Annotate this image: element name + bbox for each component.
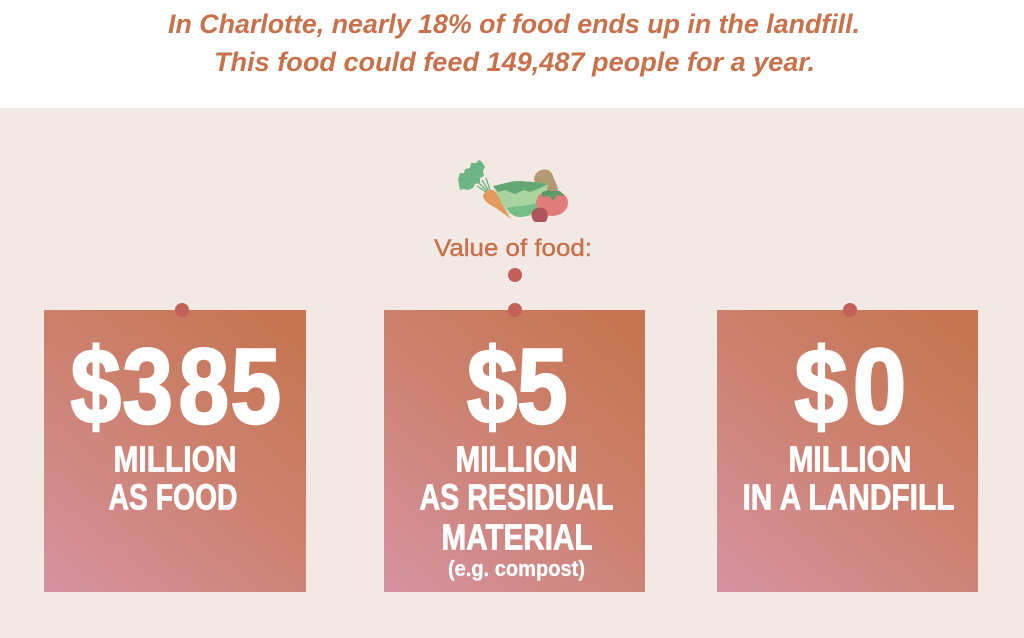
label: value of food: Value of food: xyxy=(434,235,592,262)
title: This food could feed 149,487 people for a year. xyxy=(214,47,815,77)
caption: MILLION xyxy=(114,438,236,480)
panel: in a landfill xyxy=(717,303,978,592)
connector dot xyxy=(843,303,857,317)
caption xyxy=(108,438,238,518)
connector dot xyxy=(508,303,522,317)
caption: MATERIAL xyxy=(442,516,592,558)
caption xyxy=(742,438,954,518)
caption: MILLION xyxy=(788,438,912,480)
caption: MILLION xyxy=(456,438,578,480)
icon: vegetables xyxy=(458,160,568,222)
value: $5 xyxy=(467,327,568,447)
caption: AS FOOD xyxy=(108,476,238,518)
note: (e.g. compost) xyxy=(448,556,585,581)
value: $0 xyxy=(794,326,906,446)
panel: as residual material xyxy=(384,303,645,592)
connector dot xyxy=(175,303,189,317)
caption: IN A LANDFILL xyxy=(742,476,954,518)
title xyxy=(168,9,860,77)
panel: as food xyxy=(44,303,306,592)
caption xyxy=(420,438,614,558)
value: $385 xyxy=(70,327,281,447)
connector dot xyxy=(508,268,522,282)
title: In Charlotte, nearly 18% of food ends up in the landfill. xyxy=(168,9,860,39)
caption: AS RESIDUAL xyxy=(420,476,614,518)
